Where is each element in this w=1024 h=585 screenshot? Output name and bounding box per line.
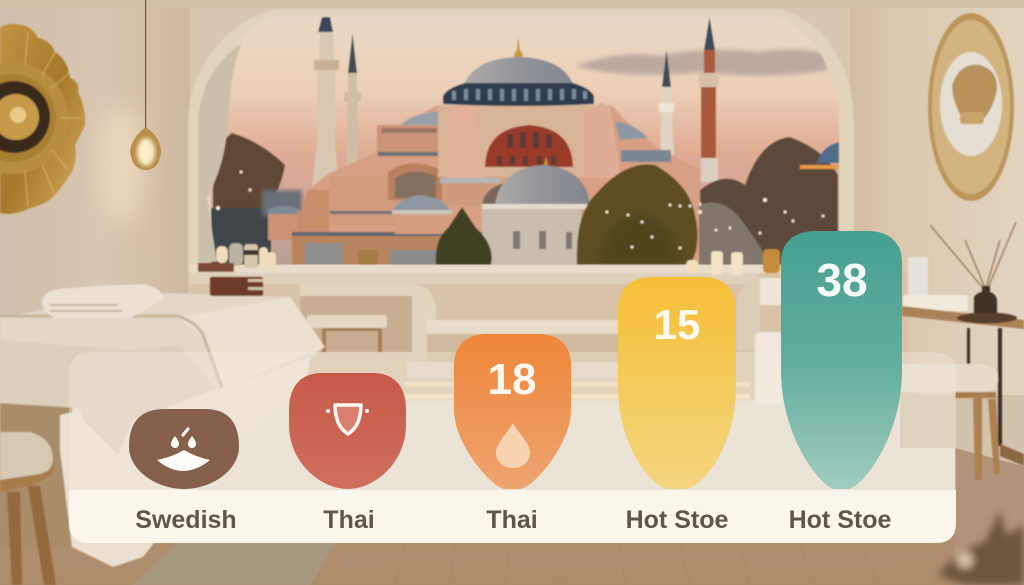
- label: Hot Stoe: Hot Stoe: [626, 506, 728, 534]
- main dome: [443, 36, 594, 106]
- main building: [268, 100, 700, 265]
- central wall and arch: [438, 105, 611, 177]
- icon: droplet: [496, 423, 530, 468]
- icon: shield: [326, 405, 369, 434]
- bar: Thai orange: [454, 334, 571, 489]
- minarets: [312, 17, 719, 187]
- value: 15: [654, 301, 700, 348]
- bar: Swedish: [129, 409, 239, 489]
- label: Swedish: Swedish: [135, 506, 237, 534]
- fairy lights: [216, 170, 824, 250]
- value: 38: [816, 254, 868, 306]
- lower dome building: [482, 157, 590, 265]
- icon: gold shell mirror: [928, 13, 1014, 201]
- bar: Hot Stone yellow: [618, 277, 736, 489]
- panel: frosted chart card: [69, 231, 956, 543]
- blurred plant: [938, 510, 1024, 585]
- massage table with towels: [0, 277, 325, 567]
- rug: [132, 543, 335, 585]
- label: Thai: Thai: [323, 506, 375, 534]
- icon: steam drops over mound: [157, 429, 210, 471]
- frosted glass area: [69, 352, 956, 490]
- label strip: [69, 490, 956, 543]
- arched window view: [188, 9, 854, 272]
- bar: Hot Stone teal: [781, 231, 902, 489]
- icon: gold sunburst wall ornament: [0, 24, 85, 214]
- icon: pendant lamp: [130, 0, 161, 170]
- left tree behind: [211, 133, 302, 265]
- bar: Thai red: [289, 373, 406, 489]
- clouds: [575, 49, 828, 76]
- label: Hot Stoe: Hot Stoe: [789, 506, 891, 534]
- trees: [436, 137, 840, 265]
- curtain: [198, 43, 242, 262]
- console table, vase and stool: [900, 222, 1024, 480]
- label: Thai: Thai: [486, 506, 538, 534]
- floor planks: [395, 545, 880, 585]
- lamp glow: [100, 105, 144, 225]
- window sill and candles: [189, 243, 850, 284]
- sofa and steps: [300, 277, 783, 404]
- left stool: [0, 432, 56, 585]
- value: 18: [488, 355, 536, 404]
